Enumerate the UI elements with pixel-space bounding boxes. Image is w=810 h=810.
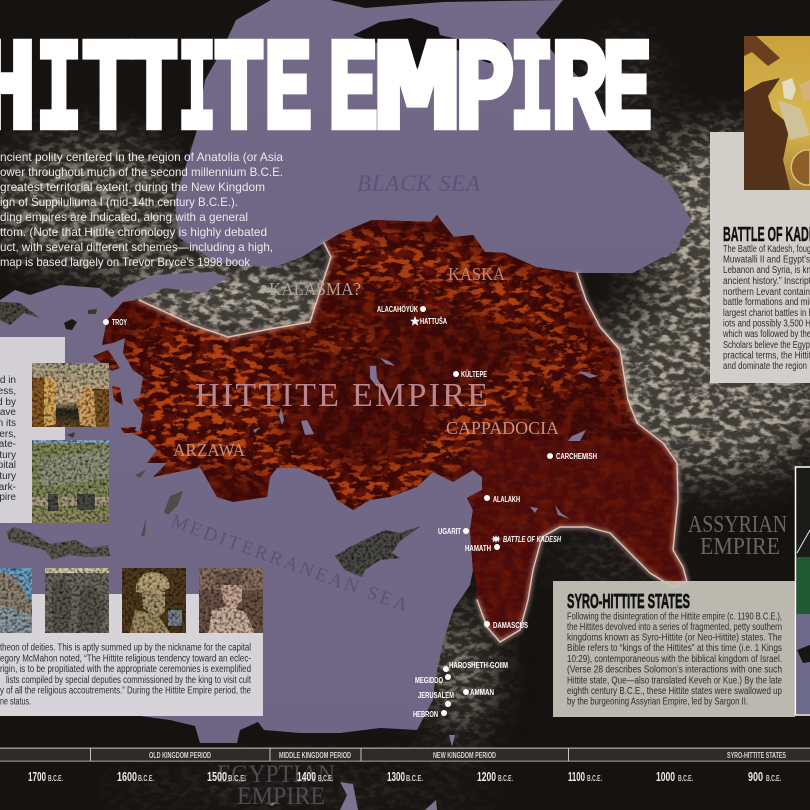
city: Amman: AMMAN: [470, 687, 494, 697]
photo: seated deity statue: [199, 568, 263, 633]
title: T: [214, 20, 264, 166]
city: Harosheth-Goiim: HAROSHETH-GOIIM: [449, 660, 508, 670]
title: I: [178, 20, 216, 166]
inland lakes: [253, 358, 598, 519]
religion text: ne status.: [0, 696, 31, 708]
title: E: [264, 20, 312, 166]
period: Middle Kingdom: MIDDLE KINGDOM PERIOD: [279, 751, 351, 760]
painting: battle scene: [744, 36, 810, 190]
period: New Kingdom: NEW KINGDOM PERIOD: [433, 751, 496, 760]
title: M: [374, 20, 460, 166]
label: Black Sea: BLACK SEA: [357, 171, 481, 196]
sea: Mediterranean: [0, 272, 482, 743]
photo: Hattusa hillside walls: [32, 440, 109, 523]
city: Harosheth-Goiim: [443, 660, 508, 672]
religion text: egory McMahon noted, “The Hittite religious tendency toward an eclec-: [0, 654, 251, 664]
body text: [722, 244, 810, 372]
title: I: [510, 20, 554, 166]
city markers: [103, 304, 597, 719]
intro text block: ower throughout much of the second millennium B.C.E.: [0, 165, 283, 179]
label: Kaska: KASKA: [448, 264, 505, 284]
empire land border: [139, 243, 687, 642]
sidebar text: [0, 375, 16, 503]
city: Alalakh: ALALAKH: [493, 494, 520, 504]
label: Egyptian Empire second line: EMPIRE: [237, 783, 325, 810]
title: R: [551, 20, 607, 166]
city: Alacahoyuk: ALACAHÖYÜK: [377, 304, 419, 314]
panel: Hattusa sidebar: [0, 337, 109, 523]
timeline: year ticks: 1700: [28, 769, 46, 784]
timeline: year ticks: B.C.E.: [766, 774, 781, 783]
timeline: year ticks: 1300: [387, 769, 405, 784]
label: Kalasma: KALAŠMA?: [269, 278, 361, 299]
panel: Battle of Kadesh: [710, 36, 810, 383]
city: Kultepe: [453, 369, 487, 379]
timeline: year ticks: B.C.E.: [228, 774, 246, 783]
title: T: [82, 20, 134, 166]
label: Assyrian Empire second line: EMPIRE: [700, 534, 780, 560]
label: Arzawa: ARZAWA: [173, 440, 245, 460]
timeline: year ticks: B.C.E.: [498, 774, 513, 783]
timeline: year ticks: 1500: [207, 769, 227, 784]
intro text block: map is based largely on Trevor Bryce’s 1998 book: [0, 255, 251, 269]
title: I: [36, 20, 82, 166]
religion text: rigin, is to be propitiated with the appropriate ceremonies is exemplified: [0, 664, 251, 675]
photo: relief of gods: [45, 568, 109, 633]
photo: statue head: [122, 568, 186, 633]
timeline: year ticks: [28, 769, 781, 784]
period: Old Kingdom: OLD KINGDOM PERIOD: [149, 751, 211, 760]
timeline: year ticks: 1000: [656, 769, 675, 784]
city: Carchemish: CARCHEMISH: [556, 451, 597, 461]
city: Hamath: HAMATH: [465, 543, 491, 553]
timeline: year ticks: B.C.E.: [138, 774, 154, 783]
city: Carchemish: [547, 451, 597, 461]
islands: Aegean: [64, 309, 183, 537]
intro text block: ncient polity centered in the region of Anatolia (or Asia: [0, 150, 283, 164]
body text: by the burgeoning Assyrian Empire, led by Sargon II.: [567, 696, 748, 708]
label: Hittite Empire region: HITTITE EMPIRE: [195, 377, 488, 414]
religion text: [0, 642, 251, 708]
city: Hebron: HEBRON: [413, 709, 438, 719]
timeline: year ticks: B.C.E.: [318, 774, 333, 783]
timeline: year ticks: 1200: [477, 769, 496, 784]
intro text block: ttom. (Note that Hittite chronology is highly debated: [0, 225, 267, 239]
religion text: theon of deities. This is aptly summed up by the nickname for the capital: [0, 642, 251, 654]
photo: Yazilikaya rock: [0, 568, 32, 633]
city: Ugarit: UGARIT: [438, 526, 462, 536]
photo: Hattusa lion gate: [32, 363, 109, 427]
title: T: [130, 20, 178, 166]
panel: religion: [0, 568, 263, 716]
territory: Hittite Empire: [93, 215, 692, 646]
battle marker: Kadesh: BATTLE OF KADESH: [503, 534, 562, 544]
intro text block: ding empires are indicated, along with a general: [0, 210, 248, 224]
city: Amman: [463, 687, 494, 697]
label: Egyptian Empire: EGYPTIAN: [217, 761, 335, 788]
timeline: year ticks: B.C.E.: [406, 774, 423, 783]
landmass: Crimea: [353, 18, 512, 78]
city: Damascus: [484, 620, 528, 630]
city: Kultepe: KÜLTEPE: [461, 369, 487, 379]
island: Cyprus: [335, 526, 421, 577]
religion text: lists compiled by special deputies commissioned by the king to visit cult: [6, 675, 251, 686]
timeline: period band: [0, 748, 810, 762]
map labels: [168, 171, 787, 810]
title: E: [328, 20, 378, 166]
city: Megiddo: MEGIDDO: [415, 675, 443, 685]
intro text block: greatest territorial extent, during the New Kingdom: [0, 180, 265, 194]
timeline: year ticks: 1400: [297, 769, 316, 784]
timeline: year ticks: 900: [748, 769, 763, 784]
title: P: [455, 20, 515, 166]
label: Mediterranean Sea: MEDITERRANEAN SEA: [168, 511, 411, 616]
city: Jerusalem: JERUSALEM: [418, 690, 454, 700]
southern land: Egypt and Levant water: [267, 735, 455, 810]
timeline: year ticks: 1100: [568, 769, 585, 784]
label: Assyrian Empire: ASSYRIAN: [688, 512, 787, 538]
label: Cappadocia: CAPPADOCIA: [446, 418, 559, 438]
city: Troy: [103, 317, 127, 327]
city: Damascus: DAMASCUS: [493, 620, 528, 630]
panel: inset map: [796, 467, 810, 715]
intro text block: [0, 150, 283, 269]
timeline: year ticks: B.C.E.: [678, 774, 693, 783]
timeline: year ticks: 1600: [117, 769, 137, 784]
religion text: y of all the religious accoutrements.” During the Hittite Empire period, the: [0, 686, 251, 696]
sea: Black Sea: [175, 0, 691, 273]
city: Hattusa: [410, 315, 447, 326]
city: Alalakh: [484, 494, 520, 504]
battle marker: Kadesh: [491, 534, 562, 544]
title: E: [602, 20, 652, 166]
panel: Syro-Hittite States: [553, 581, 795, 717]
city: Hattusa: HATTUŠA: [420, 315, 447, 326]
timeline: year ticks: B.C.E.: [48, 774, 63, 783]
city: Troy: TROY: [112, 317, 127, 327]
intro text block: uct, with several different schemes—including a high,: [0, 240, 273, 254]
body text: [567, 612, 782, 708]
city: Jerusalem: [418, 690, 454, 707]
heading: SYRO-HITTITE STATES: [567, 591, 690, 613]
timeline: year ticks: B.C.E.: [587, 774, 602, 783]
island: Greece coast: [0, 302, 40, 325]
intro text block: ign of Šuppiluliuma I (mid-14th century B.C.E.).: [0, 194, 238, 209]
island: Crete: [6, 527, 110, 560]
